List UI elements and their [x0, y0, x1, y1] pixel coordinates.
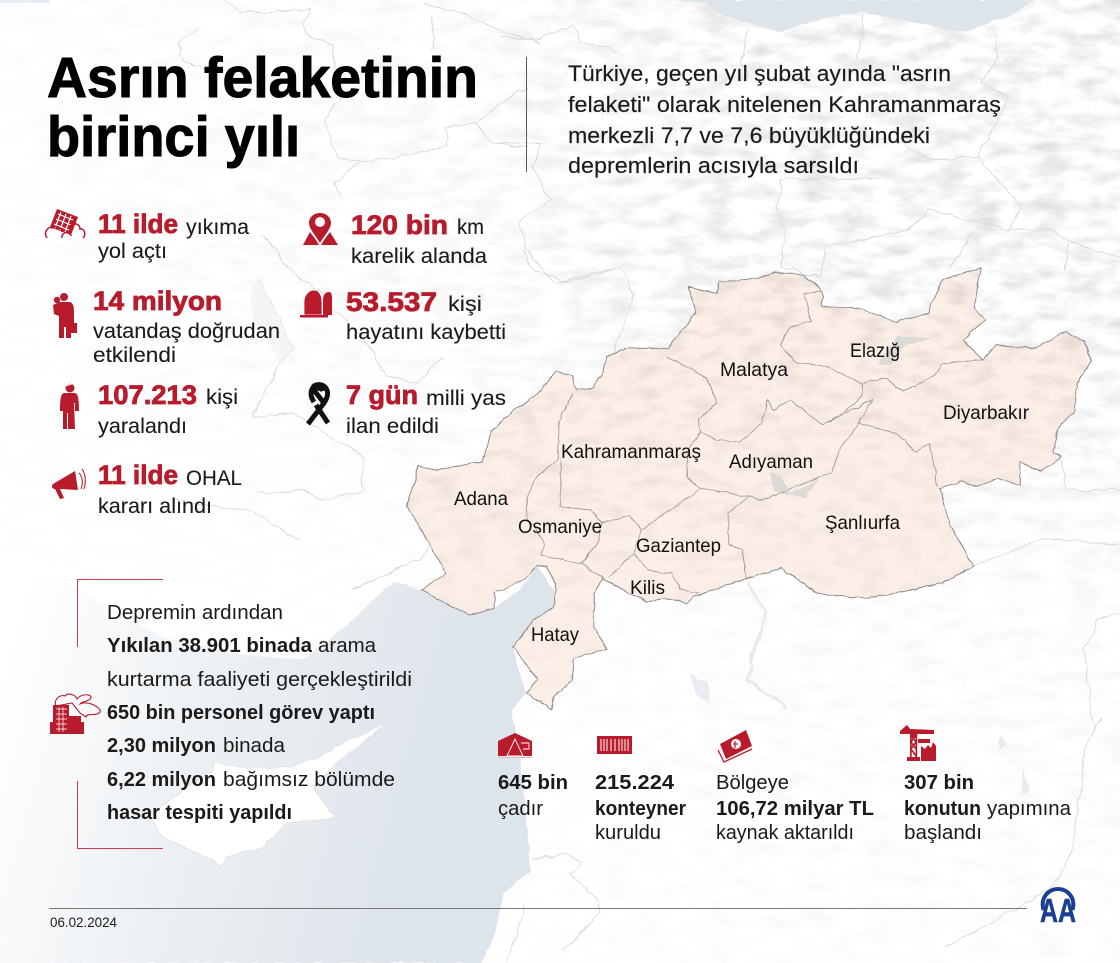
stat: 53.537: 53.537 [346, 287, 437, 317]
icon: injured person [60, 383, 79, 429]
rivers and lakes [747, 583, 786, 707]
stat: 107.213 [60, 380, 238, 438]
stat: 14 milyon [53, 286, 280, 367]
intro text: depremlerin acısıyla sarsıldı [568, 153, 859, 178]
stat: 14 milyon: 14 milyon [93, 286, 222, 316]
stat: housing: konutun [904, 798, 981, 820]
stat: 107.213: 107.213 [98, 380, 197, 410]
Cyprus [150, 723, 388, 867]
intro text: merkezli 7,7 ve 7,6 büyüklüğündeki [568, 123, 930, 148]
province labels [454, 340, 1029, 646]
date: 06.02.2024 [50, 915, 117, 930]
panel: after the earthquake [50, 580, 412, 848]
icon: container [597, 736, 632, 754]
stat: 107.213: kişi [206, 386, 238, 409]
icon: map pin [303, 213, 338, 245]
stat: containers: konteyner [595, 798, 686, 820]
stat: 14 milyon: etkilendi [93, 344, 176, 367]
panel: after the earthquake: Yıkılan 38.901 binada [107, 635, 313, 657]
stat: 7 gün: ilan edildi [346, 415, 439, 438]
icon: banknotes [718, 730, 752, 762]
icon: tent [498, 733, 532, 758]
stat: 11 il yıkım: 11 ilde [98, 209, 178, 239]
province labels: Hatay [531, 624, 579, 646]
stat: 14 milyon: vatandaş doğrudan [93, 320, 280, 343]
panel: after the earthquake: Depremin ardından [107, 602, 283, 624]
stat: 120 bin km² [303, 210, 487, 268]
title: Asrın felaketinin [47, 46, 478, 110]
intro text [568, 61, 1001, 178]
stat: 11 il OHAL [52, 460, 242, 518]
stat: funds: 106,72 milyar TL [716, 798, 874, 820]
panel: after the earthquake: 6,22 milyon [107, 769, 216, 791]
icon: person carrying child [53, 293, 77, 338]
stat: funds: kaynak aktarıldı [716, 822, 854, 844]
stat: 7 gün: 7 gün [346, 380, 418, 410]
logo: Anadolu Agency: AA [1040, 892, 1076, 929]
stat: containers: kuruldu [595, 822, 661, 844]
stat: housing: yapımına [987, 798, 1072, 820]
stat: funds: Bölgeye [716, 772, 789, 794]
Black Sea [668, 0, 1035, 32]
stat: 7 gün: milli yas [426, 387, 506, 410]
stat: housing [900, 725, 1072, 844]
stat: 120 bin km²: 120 bin [351, 210, 448, 240]
panel: after the earthquake: 650 bin personel görev yaptı [107, 702, 375, 724]
stat: tents [498, 733, 568, 820]
province labels: Malatya [720, 359, 788, 381]
province labels: Adıyaman [729, 451, 813, 473]
province labels: Osmaniye [518, 516, 602, 538]
title: birinci yılı [47, 105, 300, 169]
panel: after the earthquake: 2,30 milyon [107, 735, 216, 757]
stat: 11 il OHAL: OHAL [186, 467, 242, 490]
stat: 7 gün [308, 380, 506, 438]
panel: after the earthquake: arama [318, 635, 377, 657]
panel: after the earthquake: binada [223, 735, 286, 757]
panel: after the earthquake: hasar tespiti yapıldı [107, 802, 292, 824]
title [47, 46, 478, 169]
intro text: felaketi" olarak nitelenen Kahramanmaraş [568, 92, 1001, 117]
stat: 53.537: kişi [448, 293, 482, 316]
stat: containers [595, 736, 686, 844]
stat: tents: çadır [498, 798, 543, 820]
stat: 11 il OHAL: kararı alındı [98, 495, 212, 518]
panel: after the earthquake: kurtarma faaliyeti gerçekleştirildi [107, 669, 412, 691]
icon: gravestones [300, 290, 332, 318]
stat: housing: başlandı [904, 822, 982, 844]
province labels: Şanlıurfa [825, 512, 900, 534]
bracket [78, 580, 163, 848]
province labels: Kilis [630, 577, 665, 599]
province labels: Diyarbakır [943, 402, 1029, 424]
province labels: Adana [454, 488, 508, 510]
province labels: Elazığ [850, 340, 900, 362]
stat: 11 il OHAL: 11 ilde [98, 460, 178, 490]
stat: tents: 645 bin [498, 772, 568, 794]
stat: 11 il yıkım [46, 209, 249, 263]
icon: megaphone [52, 469, 85, 499]
stat: housing: 307 bin [904, 772, 974, 794]
icon: mourning ribbon [308, 385, 328, 424]
stat: 107.213: yaralandı [98, 415, 187, 438]
footer rule [49, 908, 1027, 910]
icon: tower crane and buildings [900, 725, 936, 761]
stat: containers: 215.224 [595, 772, 675, 794]
intro text: Türkiye, geçen yıl şubat ayında "asrın [568, 61, 951, 86]
stat: funds [716, 730, 874, 844]
stat: 120 bin km²: karelik alanda [351, 245, 487, 268]
stat: 120 bin km²: km [457, 216, 484, 239]
province labels: Kahramanmaraş [561, 441, 701, 463]
stat: 53.537 [300, 287, 506, 344]
intro divider [526, 57, 528, 172]
map: earthquake provinces [406, 267, 1092, 710]
stat: 11 il yıkım: yol açtı [98, 240, 167, 263]
icon: burning buildings [50, 694, 100, 734]
province labels: Gaziantep [636, 535, 721, 557]
stat: 11 il yıkım: yıkıma [186, 216, 249, 239]
icon: collapsing building [46, 209, 85, 238]
panel: after the earthquake: bağımsız bölümde [223, 769, 395, 791]
stat: 53.537: hayatını kaybetti [346, 321, 506, 344]
Mediterranean Sea [0, 555, 554, 963]
